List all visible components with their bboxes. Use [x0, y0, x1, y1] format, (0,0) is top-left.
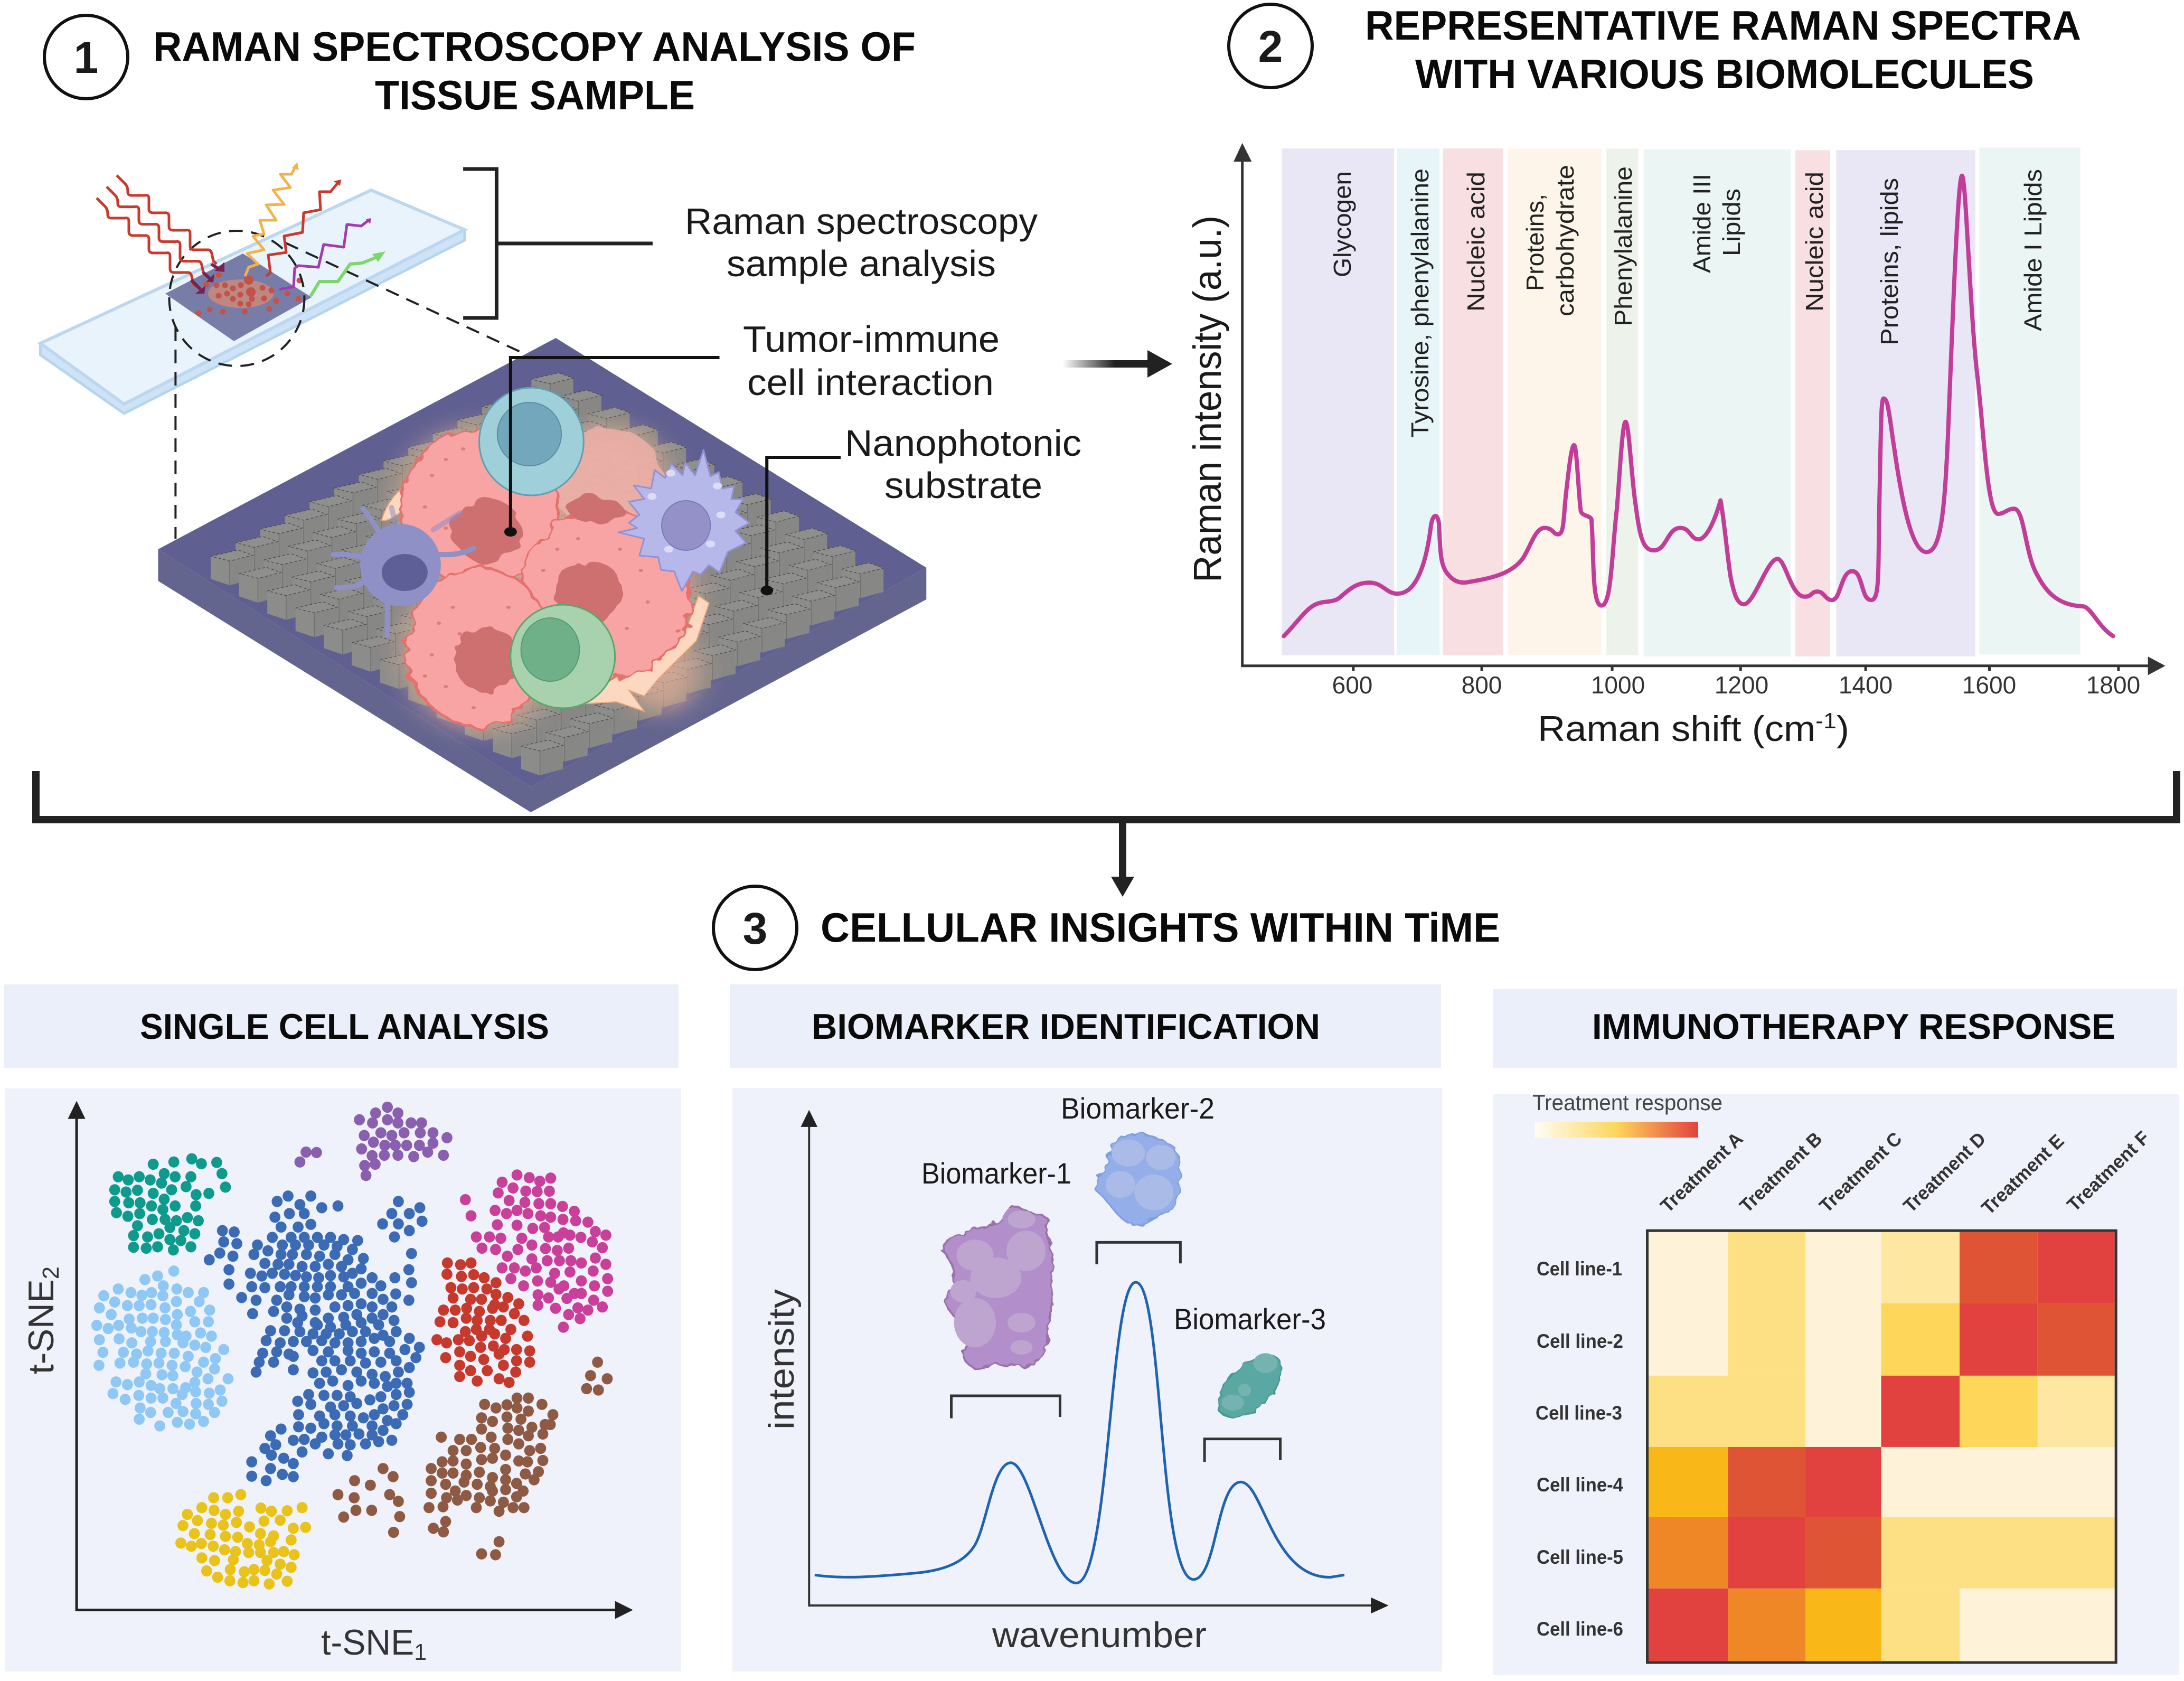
peak brackets: [952, 1242, 1281, 1462]
section 3 number badge: 3: [743, 904, 767, 953]
incident and scattered light rays: [97, 162, 385, 296]
section 1 number badge: 1: [74, 33, 98, 82]
section 2 heading: [1365, 2, 2081, 97]
protein: biomarker 3: [1207, 1345, 1293, 1429]
y axis label: 2: [38, 1266, 64, 1279]
section 2 heading: REPRESENTATIVE RAMAN SPECTRA: [1365, 2, 2081, 49]
panel: biomarker identification: [730, 984, 1442, 1671]
header bar: [1493, 989, 2177, 1068]
illustration: tissue slide and nanophotonic substrate: [41, 162, 926, 812]
label: tumor-immune cell interaction: [743, 318, 1000, 403]
teal T cell: [479, 388, 583, 495]
protein: biomarker 2: [1096, 1134, 1180, 1224]
label: nanophotonic substrate: Nanophotonic: [845, 422, 1081, 464]
x tick labels: 600: [1332, 671, 1372, 699]
cell line row labels: Cell line-4: [1537, 1474, 1623, 1496]
x axis title: Raman shift (cm: [1538, 709, 1799, 749]
arrow: section 1 to section 2: [1062, 350, 1172, 378]
y axis label: intensity: [761, 1289, 802, 1430]
treatment column labels: Treatment D: [1899, 1128, 1990, 1217]
legend: [1532, 1090, 1722, 1138]
sample bracket: [463, 169, 653, 318]
y axis label: t-SNE: [21, 1279, 61, 1374]
panel: single cell analysis: [4, 984, 681, 1671]
header bar: BIOMARKER IDENTIFICATION: [812, 1007, 1320, 1047]
label: Raman spectroscopy sample analysis: [685, 201, 1038, 284]
cell line row labels: Cell line-2: [1537, 1330, 1623, 1352]
band labels: Nucleic acid: [1801, 172, 1828, 312]
cell line row labels: Cell line-3: [1536, 1402, 1622, 1424]
band labels: carbohydrate: [1551, 165, 1579, 316]
band labels: Amide III: [1688, 174, 1716, 273]
t-SNE axes: [68, 1101, 633, 1619]
x tick labels: 1000: [1591, 671, 1645, 699]
nanopillar array: [211, 373, 883, 775]
panel background: [1493, 1094, 2179, 1675]
y axis title: Raman intensity (a.u.): [1185, 215, 1229, 583]
header bar: IMMUNOTHERAPY RESPONSE: [1592, 1007, 2115, 1047]
treatment column labels: Treatment F: [2063, 1126, 2153, 1216]
dendritic cell: [334, 508, 474, 636]
x tick labels: 800: [1462, 671, 1502, 699]
heatmap: [1648, 1231, 2116, 1663]
intensity curve: [815, 1282, 1344, 1583]
sample on slide: [165, 253, 312, 341]
x tick labels: 1400: [1839, 671, 1893, 699]
panel: immunotherapy response: [1493, 989, 2179, 1675]
section 3 heading: CELLULAR INSIGHTS WITHIN TiME: [821, 904, 1500, 951]
band labels: [1329, 165, 2047, 438]
band labels: Nucleic acid: [1462, 172, 1490, 312]
header bar: SINGLE CELL ANALYSIS: [140, 1007, 549, 1047]
treatment column labels: Treatment E: [1977, 1130, 2068, 1219]
label: tumor-immune cell interaction: cell interaction: [747, 362, 994, 403]
band labels: Phenylalanine: [1609, 166, 1637, 326]
section 1 heading: RAMAN SPECTROSCOPY ANALYSIS OF: [153, 23, 916, 70]
spectrum axes: [1234, 143, 2166, 675]
section 1 heading: [153, 23, 916, 118]
fibroblasts: [382, 475, 709, 711]
section 1 number badge: [44, 15, 128, 99]
label: nanophotonic substrate: [845, 422, 1081, 506]
biomarker labels: Biomarker-1: [921, 1157, 1071, 1190]
x axis label: 1: [414, 1639, 427, 1665]
biomarker labels: [921, 1092, 1326, 1336]
label: tumor-immune cell interaction: Tumor-immune: [743, 318, 1000, 360]
x tick labels: 1200: [1715, 671, 1768, 699]
label: Raman spectroscopy sample analysis: sample analysis: [727, 243, 996, 284]
header bar: [730, 984, 1441, 1068]
cell line row labels: Cell line-5: [1537, 1546, 1623, 1568]
glass slide: [41, 190, 465, 414]
section 2 number badge: [1229, 4, 1312, 88]
band labels: Tyrosine, phenylalanine: [1406, 168, 1434, 438]
x axis title: -1: [1815, 708, 1837, 733]
section 1 heading: TISSUE SAMPLE: [375, 72, 695, 118]
green T cell: [511, 605, 615, 708]
x tick labels: 1800: [2086, 671, 2140, 699]
x tick labels: 1600: [1962, 671, 2016, 699]
cell line row labels: Cell line-1: [1537, 1258, 1622, 1280]
cell glow: [397, 425, 700, 731]
leader lines: [511, 358, 841, 590]
section 3 number badge: [713, 886, 797, 970]
label: Raman spectroscopy sample analysis: Raman spectroscopy: [685, 201, 1038, 242]
biomarker labels: Biomarker-3: [1174, 1302, 1326, 1336]
tumor cells: [402, 428, 691, 726]
band labels: Proteins,: [1521, 194, 1549, 291]
x axis title: ): [1837, 709, 1849, 749]
section 2 number badge: 2: [1258, 22, 1283, 71]
section 2 heading: WITH VARIOUS BIOMOLECULES: [1415, 51, 2034, 97]
treatment column labels: [1656, 1126, 2153, 1219]
dashed zoom circle and guides: [170, 231, 522, 539]
t-SNE cell clusters: [97, 1107, 608, 1584]
Raman spectrum chart: [1185, 143, 2166, 749]
band labels: Lipids: [1718, 189, 1745, 256]
band labels: Amide I Lipids: [2019, 169, 2047, 331]
plot background: [732, 1088, 1442, 1671]
header bar: [4, 984, 679, 1068]
cell line row labels: Cell line-6: [1537, 1618, 1623, 1640]
arrow down to section 3: [1111, 820, 1134, 897]
x tick labels: [1332, 671, 2140, 699]
band labels: Proteins, lipids: [1876, 178, 1903, 345]
band labels: Glycogen: [1329, 171, 1356, 277]
spectrum curve: [1284, 176, 2113, 636]
bracket joining sections 1 and 2: [36, 771, 2177, 820]
treatment column labels: Treatment A: [1656, 1128, 1747, 1217]
plot background: [5, 1088, 681, 1671]
axes: [801, 1110, 1389, 1613]
axes, peaks and brackets: [801, 1110, 1389, 1613]
protein: biomarker 1: [943, 1206, 1052, 1368]
legend: Treatment response: [1532, 1090, 1722, 1115]
cell line row labels: [1536, 1258, 1623, 1640]
treatment column labels: Treatment B: [1735, 1128, 1826, 1217]
colored biomolecule bands: [1282, 148, 2081, 656]
treatment column labels: Treatment C: [1815, 1128, 1906, 1217]
substrate base: [158, 338, 926, 812]
lavender spiky cell: [618, 450, 749, 591]
label: nanophotonic substrate: substrate: [884, 465, 1042, 506]
biomarker labels: Biomarker-2: [1061, 1092, 1215, 1125]
x axis label: t-SNE: [321, 1622, 417, 1663]
x axis label: wavenumber: [992, 1615, 1207, 1655]
